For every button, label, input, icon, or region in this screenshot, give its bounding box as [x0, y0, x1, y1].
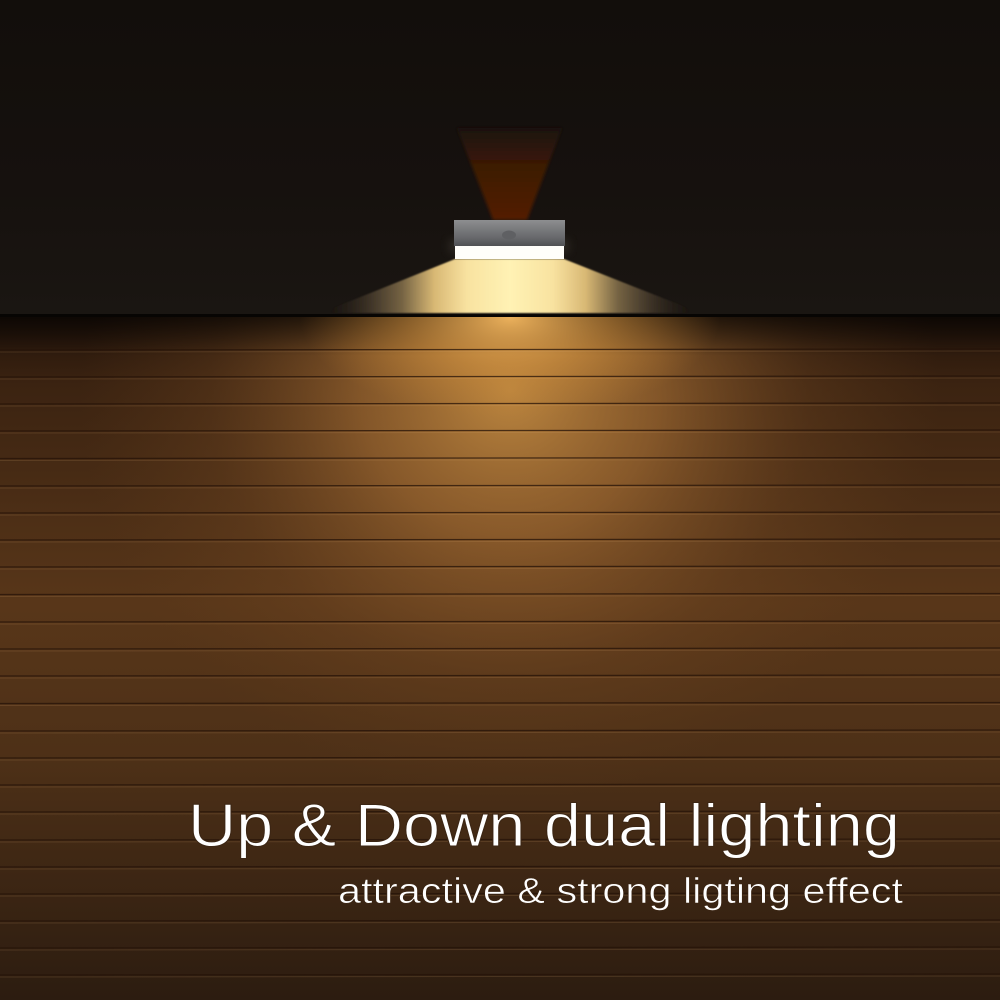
lamp side glow [450, 240, 568, 252]
lamp housing [454, 220, 565, 246]
downward light beam [330, 259, 690, 313]
wood slat wall [0, 316, 1000, 1000]
dark upper wall [0, 0, 1000, 316]
slat grooves [0, 349, 1000, 975]
ledge shadow line [0, 314, 1000, 317]
light strip [455, 246, 564, 259]
subtitle: attractive & strong ligting effect [338, 870, 903, 911]
wall lamp [450, 220, 568, 259]
title: Up & Down dual lighting [188, 792, 900, 859]
upward light beam [457, 128, 562, 220]
motion sensor [502, 230, 516, 240]
